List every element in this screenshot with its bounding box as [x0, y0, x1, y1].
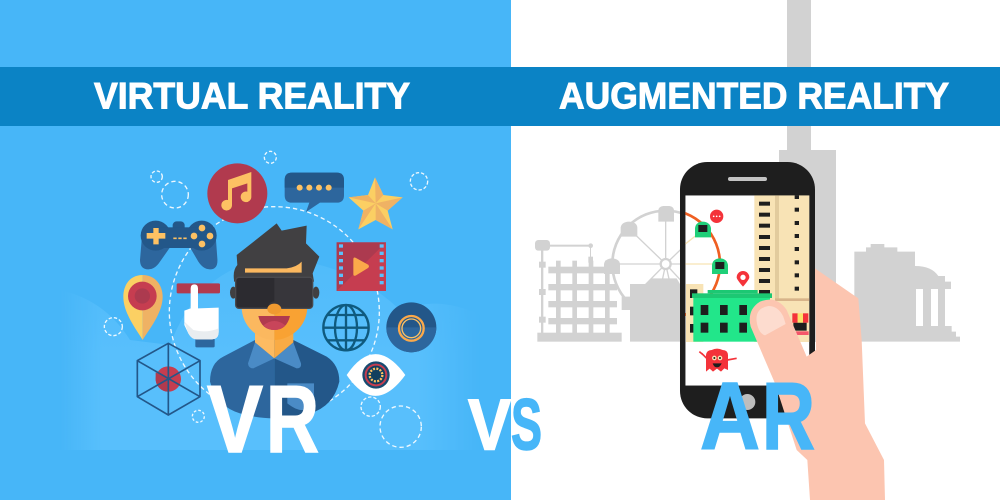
- icon: film with play button: [337, 242, 386, 291]
- panel: virtual reality background: [0, 0, 511, 500]
- illustration: VR icons and person: [104, 151, 436, 447]
- icon: game controller: [140, 221, 217, 269]
- label: VS: [468, 386, 542, 466]
- dashed orbit and small circles: [104, 151, 428, 447]
- icon: globe: [323, 305, 369, 350]
- AR shop awning: [792, 313, 809, 335]
- AR green building: [692, 290, 772, 342]
- panel: augmented reality background: [511, 0, 1000, 500]
- label: VS: V: [468, 386, 511, 466]
- icon: pointing hand: [177, 283, 220, 347]
- heading: augmented reality: AUGMENTED REALITY: [559, 76, 949, 116]
- phone body: [680, 162, 815, 418]
- label: AR: R: [762, 363, 815, 470]
- icon: 3D cube: [137, 343, 200, 415]
- hand holding phone: [750, 268, 885, 500]
- label: VR: V: [207, 366, 263, 473]
- icon: music note: [207, 163, 267, 223]
- person wearing VR headset: [210, 223, 339, 418]
- icon: red chat bubble: [710, 210, 723, 223]
- label: VR: R: [266, 366, 319, 473]
- heading: virtual reality: VIRTUAL REALITY: [94, 76, 410, 116]
- label: VS: S: [511, 386, 542, 466]
- AR small tan building: [686, 284, 703, 342]
- phone screen: [685, 195, 810, 386]
- illustration: phone showing AR scene: [680, 162, 885, 500]
- header band: [0, 67, 1000, 126]
- label: AR: [700, 363, 815, 470]
- label: AR: A: [700, 363, 760, 470]
- AR ferris wheel: [685, 212, 728, 316]
- icon: speech bubble: [285, 173, 344, 212]
- AR tower building: [754, 195, 809, 342]
- icon: red location pin: [737, 271, 749, 287]
- AR red monster: [699, 349, 737, 372]
- phone home button: [739, 394, 755, 410]
- icon: map pin: [123, 275, 163, 340]
- thumbnail: [756, 306, 786, 335]
- icon: star: [349, 177, 403, 229]
- label: VR: [207, 366, 319, 473]
- icon: camera lens: [386, 302, 436, 352]
- icon: eye: [347, 354, 405, 396]
- illustration: grey city skyline: [535, 0, 960, 342]
- phone speaker: [728, 177, 767, 181]
